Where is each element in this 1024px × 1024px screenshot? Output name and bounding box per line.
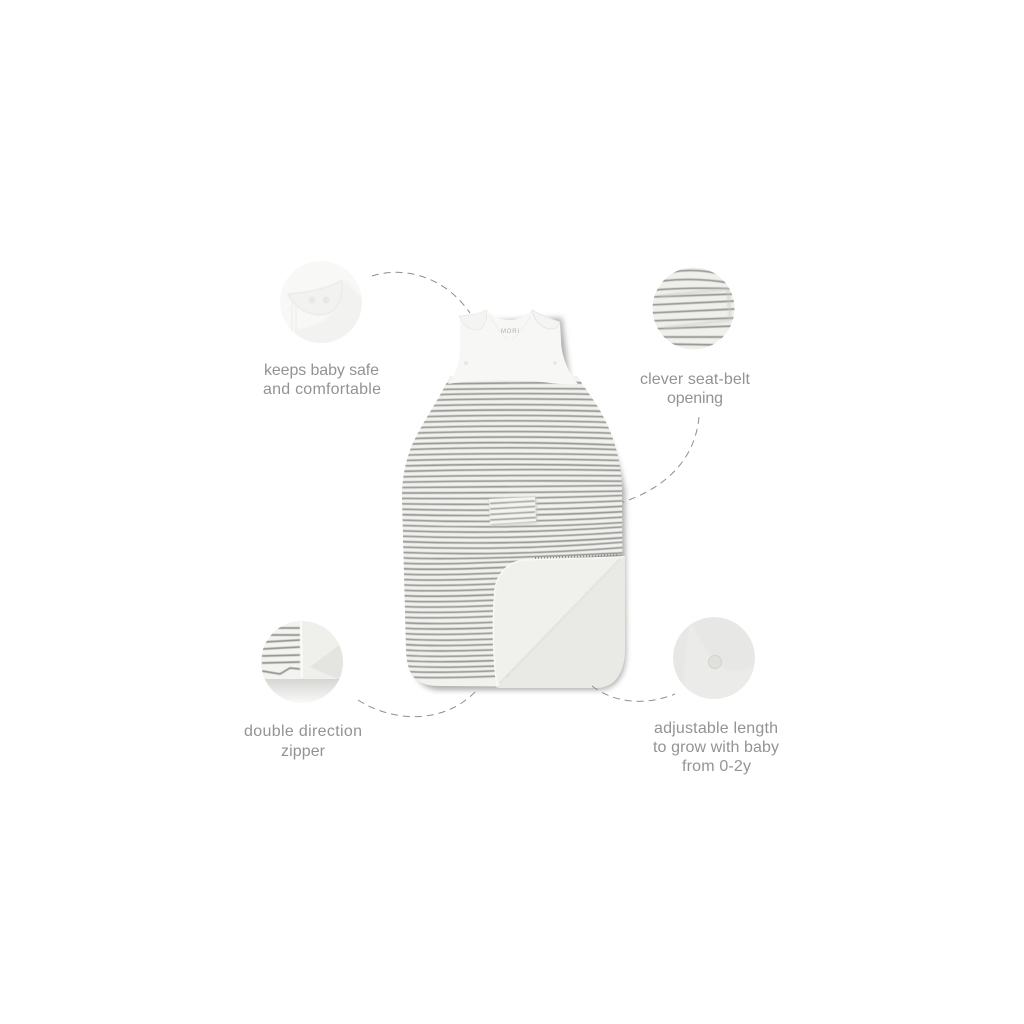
caption: safe: keeps baby safe	[264, 362, 379, 379]
caption: seat-belt: opening	[667, 390, 723, 407]
detail circle: adjustable snap	[673, 617, 755, 705]
folded lining, upper flap	[493, 557, 622, 686]
stitched fold edge	[535, 555, 618, 558]
caption: length: to grow with baby	[653, 739, 779, 756]
caption: seat-belt: clever seat-belt	[640, 371, 751, 388]
caption: length: from 0-2y	[682, 758, 751, 775]
detail circle: zipper	[261, 621, 343, 702]
dashed connector: zipper	[358, 689, 478, 717]
caption: zipper: zipper	[281, 743, 326, 760]
dashed connector: seat-belt	[623, 417, 699, 502]
dashed connector: length	[592, 686, 675, 701]
logo mark on yoke: MORI	[501, 329, 519, 335]
neck stitching	[490, 316, 531, 340]
caption: safe	[263, 362, 381, 398]
right strap	[532, 310, 560, 329]
side snaps	[464, 361, 557, 365]
left strap	[459, 310, 487, 330]
detail circle: seat-belt opening	[650, 268, 740, 350]
seat-belt pocket	[489, 497, 537, 526]
product: sleep bag	[400, 310, 626, 690]
caption: length: adjustable length	[654, 720, 778, 737]
soft shadow	[412, 318, 626, 690]
caption: seat-belt	[640, 371, 751, 407]
caption: zipper	[244, 723, 362, 760]
caption: length	[653, 720, 779, 775]
fold crease	[499, 558, 621, 684]
dashed connector: safe	[372, 272, 470, 313]
white yoke	[448, 310, 578, 384]
snap button	[708, 656, 722, 668]
stripes	[400, 383, 625, 678]
detail circle: shoulder snap	[286, 278, 362, 343]
folded lining, lower flap	[497, 556, 625, 688]
caption: safe: and comfortable	[263, 381, 381, 398]
caption: zipper: double direction	[244, 723, 362, 740]
striped body	[402, 376, 623, 687]
